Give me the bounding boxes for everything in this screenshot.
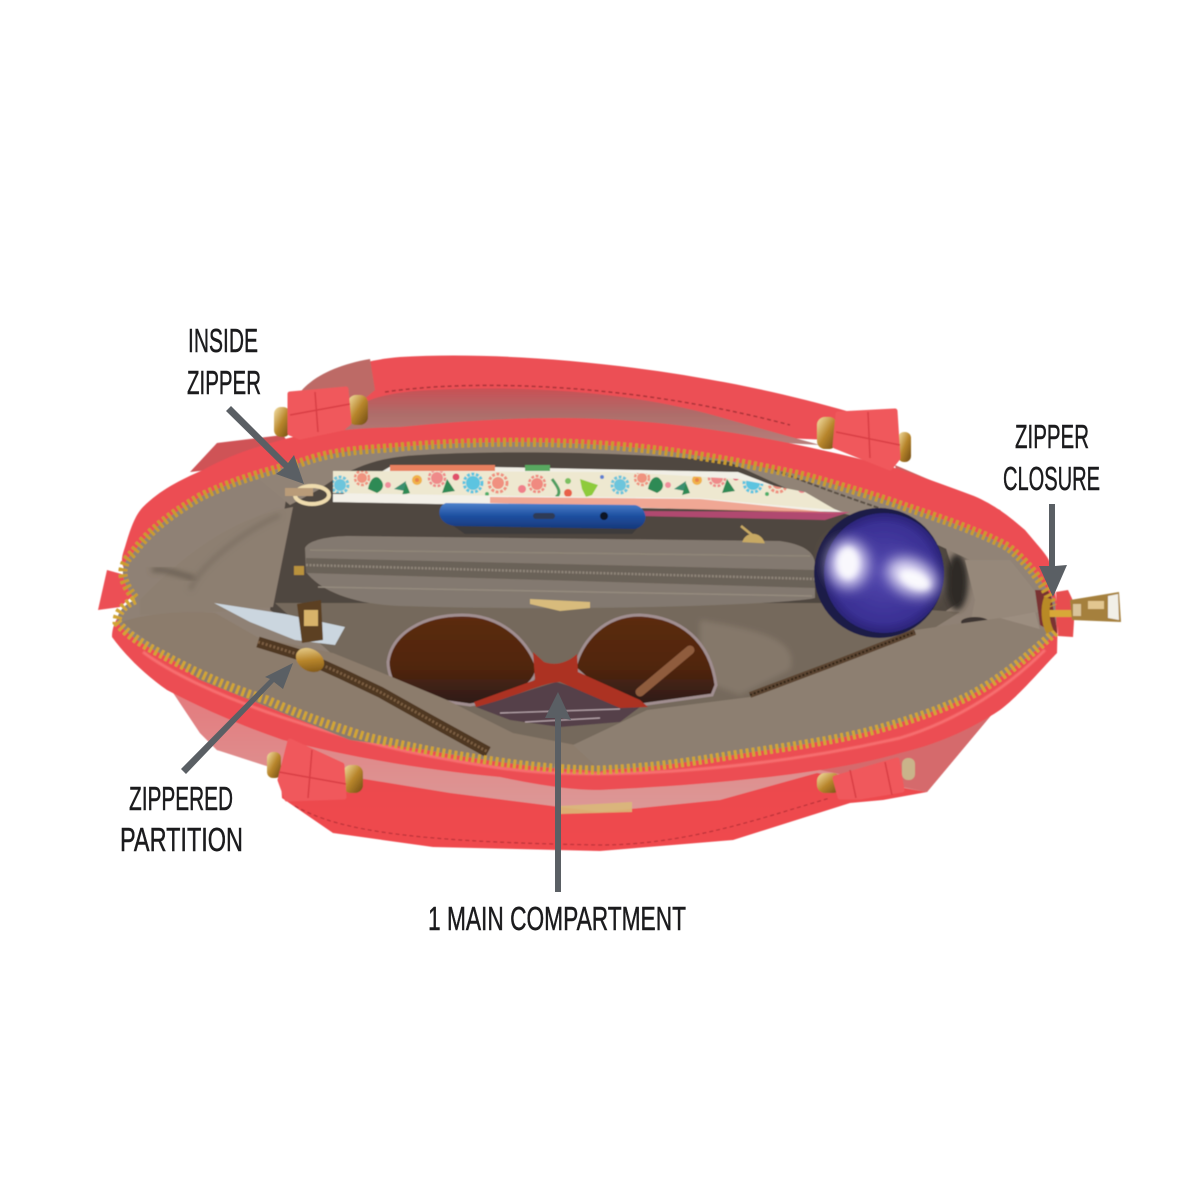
floor behind sunglasses: [275, 603, 960, 750]
back handle: [290, 356, 850, 445]
handle loop top right: [817, 411, 911, 468]
left lining folds: [270, 506, 294, 608]
zipper tape bottom: [117, 600, 1057, 770]
zipper tape top: [123, 442, 1053, 606]
right lining: [964, 560, 974, 590]
label: zippered partition: PARTITION: [120, 821, 243, 858]
infographic canvas: [98, 328, 1122, 930]
front panel: [170, 688, 1010, 851]
partition zipper tag and pull: [292, 600, 328, 677]
handle loop bottom right: [817, 758, 915, 798]
wallet logo: [530, 599, 590, 611]
label: zipper closure: [1003, 418, 1100, 497]
label: zippered partition: ZIPPERED: [129, 780, 233, 817]
wallet: [294, 526, 815, 611]
shadow beside sphere: [946, 554, 968, 610]
label: main compartment: 1 MAIN COMPARTMENT: [428, 900, 686, 937]
handle loop bottom left: [267, 741, 363, 799]
keyring: [741, 526, 763, 542]
right partition pocket: [573, 618, 1050, 770]
arrow: zipper closure: [1039, 504, 1067, 597]
label: zippered partition: [120, 780, 243, 858]
rim highlight: [143, 650, 1045, 774]
outer rim: [112, 418, 1058, 790]
top flap: [285, 449, 968, 558]
phone: [439, 503, 646, 534]
white paper: [214, 603, 345, 645]
left partition pocket: [122, 612, 620, 772]
back panel sides: [190, 435, 1030, 545]
inside zipper pull: [285, 486, 329, 504]
label: zipper closure: ZIPPER: [1015, 418, 1089, 455]
sunglasses: [388, 615, 716, 727]
label: zipper closure: CLOSURE: [1003, 460, 1100, 497]
dark inner wall: [270, 452, 954, 615]
book: [333, 465, 850, 520]
stitched seam: [774, 470, 879, 509]
label: inside zipper: ZIPPER: [187, 364, 261, 401]
handle loop top left: [274, 389, 368, 437]
lining: [116, 442, 1058, 770]
front logo: [560, 802, 632, 814]
arrow: main compartment: [545, 692, 571, 892]
purple sphere: [814, 508, 944, 638]
arrow: inside zipper: [226, 406, 304, 484]
arrow: zippered partition: [181, 663, 293, 774]
red interior at closure end: [1035, 590, 1058, 635]
side tab left: [98, 570, 137, 610]
label: inside zipper: INSIDE: [188, 322, 258, 359]
closure zipper pull: [1046, 590, 1121, 637]
label: inside zipper: [187, 322, 261, 401]
handbag: [98, 356, 1121, 851]
